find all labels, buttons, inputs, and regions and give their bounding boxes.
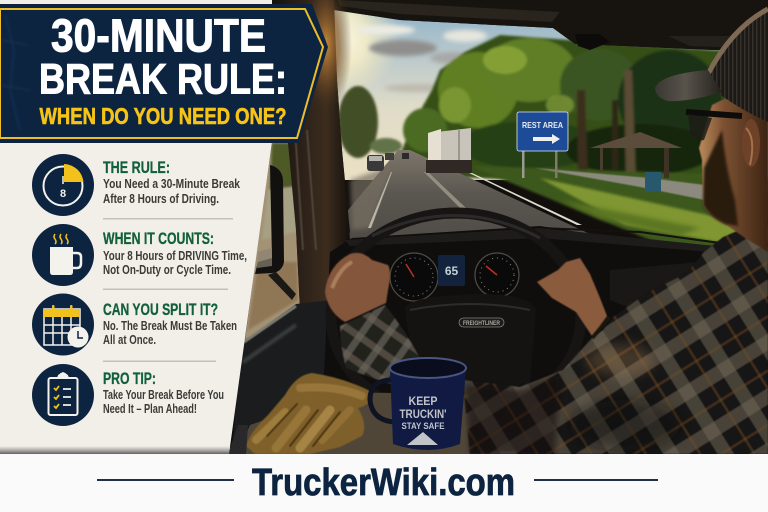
A-pillar [276,0,351,304]
road sign: rest area: REST AREA [522,120,563,130]
item: the rule [32,154,240,216]
left door window with roadside view [245,143,300,340]
banner: title [0,4,328,143]
body text: All at Once. [103,333,156,347]
icon: clock with 8 [32,154,94,216]
title line 2: BREAK RULE: [39,56,287,104]
side mirror [255,165,296,300]
steering wheel hub: FREIGHTLINER [463,321,501,327]
driver head and beard [686,90,768,252]
picnic shelter and trash bin [590,132,682,192]
driver right hand [537,258,610,338]
heading: PRO TIP: [103,370,156,388]
website name: TruckerWiki.com [252,462,515,504]
body text [103,319,237,347]
body text [103,249,247,277]
footer: website [0,454,768,512]
work gloves [246,373,372,454]
road sign: rest area [517,112,568,178]
item: when it counts [32,224,247,286]
dash surface under gloves and mug [238,392,490,454]
item: can you split it [32,294,237,356]
mug: Keep Truckin' Stay Safe: KEEP [408,394,438,408]
heading: THE RULE: [103,159,170,177]
wipers [540,228,720,243]
dashboard [324,226,712,377]
mug: Keep Truckin' Stay Safe: STAY SAFE [402,421,444,432]
cars on the road [367,153,409,171]
mug: Keep Truckin' Stay Safe: TRUCKIN' [400,409,447,421]
instrument cluster [390,253,519,301]
subtitle: WHEN DO YOU NEED ONE? [40,103,286,129]
denim under the gloves [228,425,248,454]
body text [103,388,224,416]
door panel [233,300,327,438]
body text: After 8 Hours of Driving. [103,192,219,206]
body text: No. The Break Must Be Taken [103,319,237,333]
icon: white semi truck trailer [426,128,472,173]
heading: WHEN IT COUNTS: [103,230,214,248]
body text: Need It – Plan Ahead! [103,402,197,416]
windshield view: road, trees and rest area [334,10,768,262]
body text: Take Your Break Before You [103,388,224,402]
trucker cap [655,8,768,122]
driver left sleeve [340,304,419,384]
body text: Not On-Duty or Cycle Time. [103,263,231,277]
title line 1: 30-MINUTE [51,10,266,62]
steering wheel rim [326,208,540,323]
driver shirt and right arm [463,218,768,454]
panel: rules list [0,0,328,454]
gauge: speedometer [390,253,438,301]
icon: steaming coffee mug [32,224,94,286]
mug: Keep Truckin' Stay Safe [370,358,466,450]
icon: clock with 8: 8 [60,188,66,200]
photo: truck cab interior scene [228,0,768,454]
icon: calendar with clock [32,294,94,356]
digital speed display: 65 [445,264,458,278]
heading: CAN YOU SPLIT IT? [103,301,218,319]
gauge: tachometer [475,253,519,297]
body text: You Need a 30-Minute Break [103,177,240,191]
body text [103,177,240,206]
steering wheel hub [410,294,530,328]
item: pro tip [32,364,224,426]
driver left hand [325,253,390,322]
cab roof and headliner [333,0,768,50]
body text: Your 8 Hours of DRIVING Time, [103,249,247,263]
icon: checklist clipboard [32,364,94,426]
